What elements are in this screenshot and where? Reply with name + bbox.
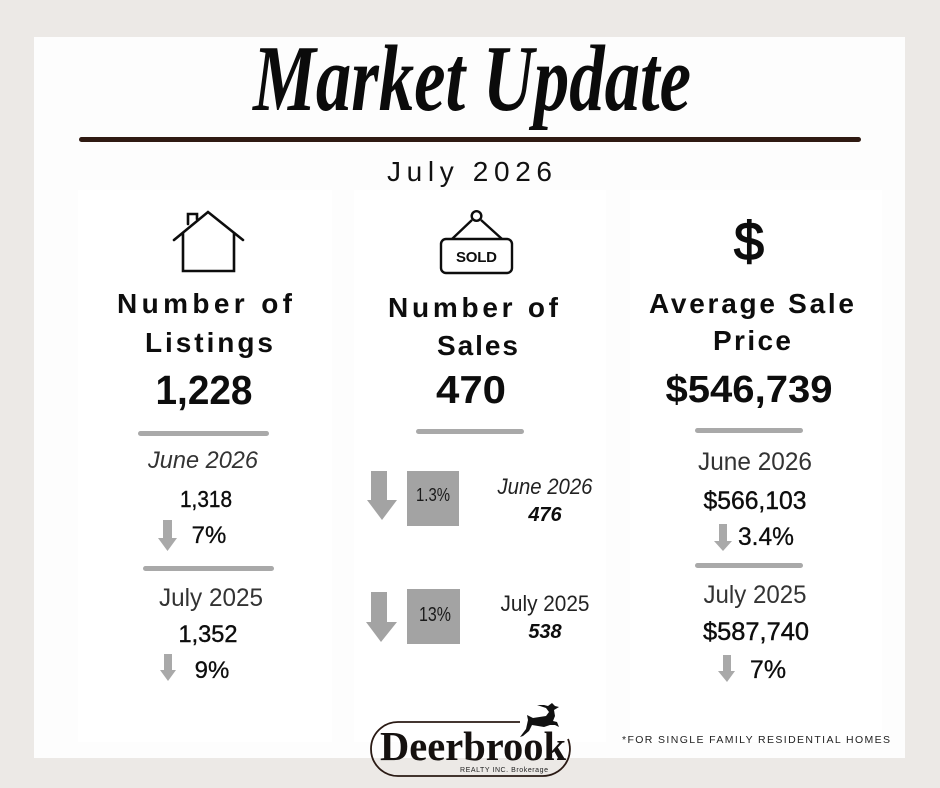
heading: average sale price	[649, 288, 854, 356]
heading: number of listings: Listings	[145, 327, 273, 358]
heading: number of listings	[117, 288, 293, 358]
change: 7%: 7%	[750, 656, 786, 684]
badge: 13%	[407, 589, 460, 644]
value: 1,228: 1,228	[156, 367, 252, 413]
heading: average sale price: Average Sale	[649, 288, 854, 319]
arrow: down	[367, 471, 397, 520]
arrow: down	[366, 592, 397, 642]
arrow: down	[714, 524, 732, 551]
heading: number of listings: Number of	[117, 288, 293, 319]
label: June 2026: June 2026	[497, 474, 593, 499]
divider	[695, 563, 803, 568]
label: July 2025: July 2025	[500, 591, 590, 616]
arrow: down	[718, 655, 735, 682]
value: $566,103: $566,103	[704, 487, 806, 515]
panel: sales	[366, 211, 593, 644]
heading: number of sales	[388, 292, 559, 361]
icon: sold sign	[441, 211, 512, 273]
icon: sold sign: SOLD	[456, 249, 497, 266]
divider	[138, 431, 269, 436]
value: 1,318: 1,318	[180, 486, 232, 512]
panel: backgrounds	[78, 190, 882, 742]
icon: house	[174, 212, 243, 271]
logo: Deerbrook	[371, 703, 570, 776]
logo tagline: REALTY INC. Brokerage	[460, 767, 548, 774]
icon: leaping deer	[520, 703, 559, 737]
divider	[143, 566, 274, 571]
icon: dollar sign: $	[734, 212, 764, 272]
value: 470: 470	[436, 369, 506, 412]
panel: average sale price	[649, 212, 854, 684]
value: 538: 538	[528, 621, 563, 643]
logo wordmark: Deerbrook	[380, 723, 566, 769]
arrow: down	[158, 520, 177, 551]
badge: 1.3%	[407, 471, 459, 526]
title rule	[79, 137, 861, 142]
arrow: down	[160, 654, 176, 681]
heading: number of sales: Number of	[388, 292, 559, 323]
value: $587,740: $587,740	[703, 618, 809, 646]
label: July 2025: July 2025	[704, 581, 806, 609]
panel: listings	[117, 212, 293, 684]
change: 3.4%: 3.4%	[738, 523, 794, 551]
change: 7%: 7%	[192, 522, 226, 549]
value: 476: 476	[527, 504, 563, 526]
change: 9%: 9%	[195, 657, 229, 684]
footnote: *FOR SINGLE FAMILY RESIDENTIAL HOMES	[622, 734, 890, 746]
badge: 13%: 13%	[419, 604, 451, 626]
divider	[416, 429, 524, 434]
divider	[695, 428, 803, 433]
label: June 2026: June 2026	[147, 447, 259, 474]
label: July 2025: July 2025	[159, 584, 263, 612]
label: June 2026: June 2026	[698, 448, 812, 476]
value: $546,739: $546,739	[666, 369, 832, 411]
subtitle: date: July 2026	[387, 156, 552, 187]
title: Market Update	[251, 27, 691, 131]
badge: 1.3%: 1.3%	[416, 485, 450, 505]
value: 1,352: 1,352	[178, 621, 238, 648]
heading: average sale price: Price	[713, 325, 791, 356]
heading: number of sales: Sales	[437, 330, 518, 361]
